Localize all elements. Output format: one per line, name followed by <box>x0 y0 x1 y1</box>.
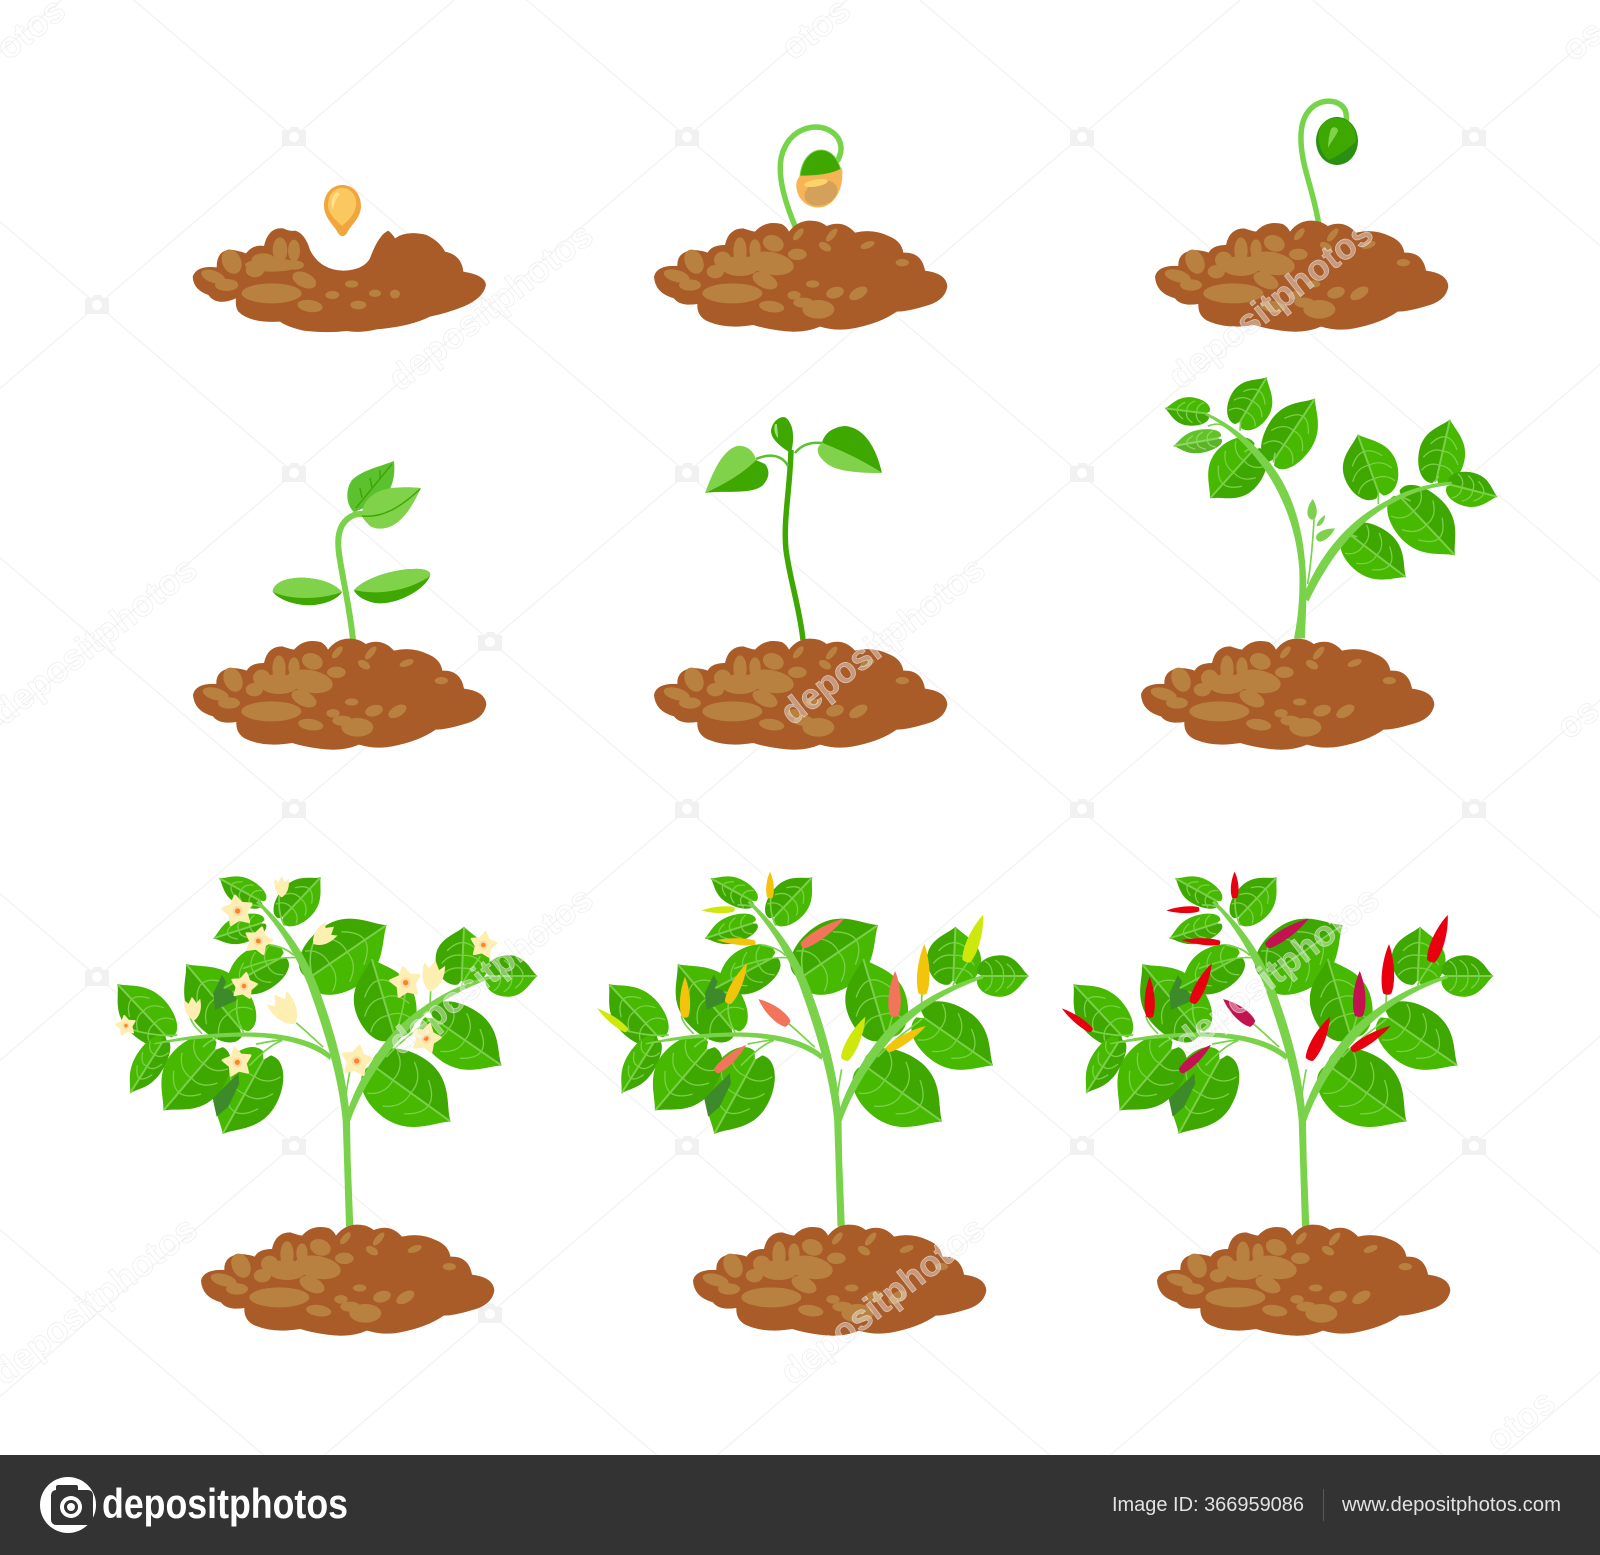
icon: camera logo <box>40 1477 96 1533</box>
flowers <box>115 876 498 1076</box>
bud <box>771 417 793 453</box>
seed <box>324 185 361 236</box>
stage 8: plant with ripening peppers <box>592 864 1029 1336</box>
watermark text: depositphotos <box>772 1208 993 1393</box>
sprout stem <box>780 127 841 226</box>
soil mound <box>1157 1225 1450 1336</box>
stage 6: branching plant <box>1141 366 1502 750</box>
image id: Image ID: 366959086 <box>1112 1494 1304 1516</box>
watermark text: otos <box>1478 1381 1563 1460</box>
soil mound <box>1155 221 1448 332</box>
cotyledon left <box>273 578 342 605</box>
stage 4: seedling with cotyledons <box>193 461 486 750</box>
watermark camera icons <box>85 127 1486 1323</box>
stage 3: sprout with pea head <box>1155 101 1448 332</box>
front true leaf <box>362 487 421 529</box>
plant foliage <box>592 864 1029 1227</box>
leaf petioles <box>756 443 822 466</box>
watermark text: depositphotos <box>380 214 601 399</box>
soil mound <box>201 1225 494 1336</box>
back true leaf <box>347 461 394 512</box>
soil mound <box>193 639 486 750</box>
stage 1: seed above soil <box>193 185 486 332</box>
website url: www.depositphotos.com <box>1341 1494 1561 1516</box>
watermark text: depositphotos <box>380 878 601 1063</box>
soil mound <box>654 221 947 332</box>
watermark text: depositphotos <box>1166 878 1387 1063</box>
plant <box>1163 366 1502 638</box>
stage 5: young plant <box>654 417 947 750</box>
stem <box>785 450 803 640</box>
seed coat with leaf <box>796 150 842 210</box>
cotyledon right <box>354 569 430 603</box>
stage 2: germinating seed <box>654 127 947 332</box>
stem <box>338 514 387 640</box>
soil mound <box>1141 639 1434 750</box>
soil mound with hollow <box>193 228 486 332</box>
green bud <box>1316 117 1358 165</box>
soil mound <box>693 1225 986 1336</box>
soil mound <box>654 639 947 750</box>
left leaf <box>705 446 768 493</box>
stage 7: flowering plant <box>100 864 537 1336</box>
sprout stem <box>1301 101 1346 226</box>
ripe peppers <box>1060 872 1454 1075</box>
logo wordmark: depositphotos <box>102 1480 348 1527</box>
right leaf <box>818 426 882 473</box>
plant foliage <box>1056 864 1493 1227</box>
footer bar <box>0 1455 1600 1555</box>
stage 9: plant with ripe red peppers <box>1056 864 1493 1336</box>
unripe peppers <box>595 872 989 1075</box>
plant foliage <box>100 864 537 1227</box>
watermark text: depositphotos <box>1160 212 1381 397</box>
watermark text: depositphotos <box>772 548 993 733</box>
